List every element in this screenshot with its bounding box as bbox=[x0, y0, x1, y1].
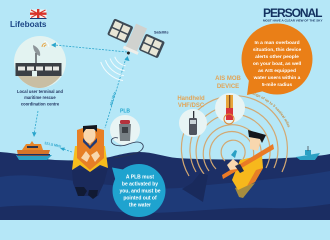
lifebelt bbox=[222, 144, 274, 179]
legs bbox=[72, 168, 108, 196]
arm and hand bbox=[227, 159, 238, 170]
AIS circle bbox=[215, 93, 245, 123]
satellite label: Satellite bbox=[154, 31, 169, 35]
hands bbox=[81, 151, 100, 162]
arrowheads bbox=[32, 42, 130, 151]
lifeboat bbox=[16, 141, 52, 160]
centre caption: maritime rescue bbox=[24, 95, 56, 100]
PLB lanyard bbox=[111, 138, 143, 158]
callout: PLB bbox=[112, 164, 166, 217]
bubble text: situation, this device bbox=[253, 47, 301, 53]
logo wordmark: Lifeboats bbox=[10, 19, 47, 29]
handheld label: Handheld bbox=[177, 96, 205, 102]
bubble text: the water bbox=[129, 202, 151, 208]
AIS label: AIS MOB bbox=[215, 76, 241, 82]
jacket shade bbox=[247, 168, 263, 186]
bubble text: water users within a bbox=[253, 75, 301, 81]
man overboard bbox=[182, 130, 274, 202]
PLB circle bbox=[110, 115, 140, 145]
fishing boat bbox=[296, 146, 320, 160]
frequency labels bbox=[44, 91, 117, 149]
bubble text: In a man overboard bbox=[254, 40, 300, 46]
panel: handheld VHF/DSC bbox=[177, 96, 207, 137]
leg bbox=[182, 173, 208, 202]
bubble text: A PLB must bbox=[126, 174, 154, 180]
icon: satellite bbox=[103, 15, 167, 66]
bubble text: on your boat, as well bbox=[253, 61, 302, 67]
frequency labels: 406 MHz bbox=[109, 91, 117, 106]
centre caption: Local user terminal and bbox=[17, 89, 63, 94]
bubble text: as AIS equipped bbox=[258, 68, 296, 74]
handheld circle bbox=[179, 109, 207, 137]
PLB label: PLB bbox=[120, 108, 130, 114]
icon: satellite dish bbox=[33, 41, 49, 63]
ground mound bbox=[18, 76, 60, 88]
hair bbox=[83, 125, 97, 133]
head bbox=[84, 127, 96, 143]
jacket bbox=[232, 155, 263, 190]
heading wordmark: PERSONAL bbox=[263, 6, 322, 20]
handheld label: VHF/DSC bbox=[178, 103, 205, 109]
panel: AIS MOB device bbox=[215, 76, 245, 124]
icon: beacon bbox=[224, 95, 234, 124]
radio waves bbox=[101, 57, 126, 81]
bubble text: you, and must be bbox=[119, 188, 161, 194]
head bbox=[250, 137, 261, 151]
tagline: MOST HAVE A CLEAR VIEW OF THE SKY bbox=[263, 18, 323, 22]
signal lines bbox=[34, 45, 127, 152]
Lifeboats logo bbox=[10, 9, 47, 29]
boots bbox=[75, 187, 98, 199]
lifejacket bbox=[77, 128, 104, 170]
bubble shape bbox=[242, 24, 312, 95]
range text: Range of up to 5 nautical miles bbox=[252, 93, 290, 128]
PLB bbox=[110, 108, 143, 158]
PERSONAL heading bbox=[263, 6, 323, 22]
bubble text: be activated by bbox=[122, 182, 158, 188]
frequency labels: 121.5 MHz bbox=[44, 141, 62, 149]
bubble text: pointed out of bbox=[123, 196, 157, 202]
range rings bbox=[181, 96, 287, 176]
logo flag bbox=[30, 9, 46, 18]
terminal circle bbox=[14, 36, 66, 88]
collar bbox=[83, 138, 97, 149]
waist bbox=[235, 183, 255, 198]
jacket bbox=[72, 146, 108, 172]
held device bbox=[231, 150, 237, 158]
PLB device bbox=[119, 120, 131, 141]
building bbox=[16, 63, 62, 76]
callout: AIS bbox=[242, 24, 312, 95]
AIS label: DEVICE bbox=[217, 84, 239, 90]
centre caption: coordination centre bbox=[21, 101, 60, 106]
bubble text: alerts other people bbox=[255, 54, 299, 60]
bubble shape bbox=[112, 164, 166, 217]
hair bbox=[248, 130, 266, 143]
icon: radio bbox=[189, 111, 197, 135]
bubble text: 5-mile radius bbox=[262, 82, 292, 88]
panel: coordination centre bbox=[14, 36, 66, 106]
sea background bbox=[0, 152, 330, 220]
man with PLB bbox=[72, 125, 108, 199]
